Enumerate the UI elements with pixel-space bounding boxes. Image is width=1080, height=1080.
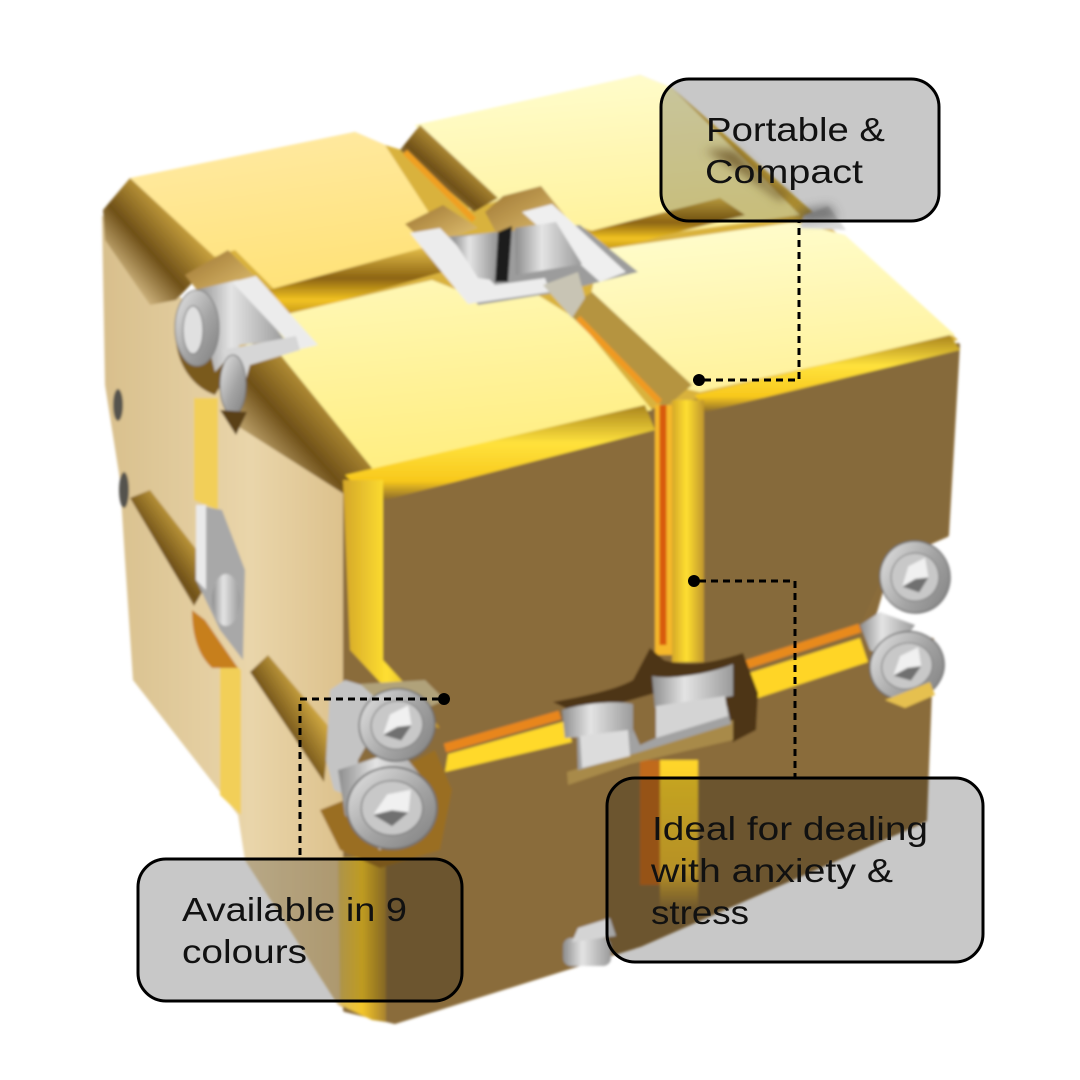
callout: Portable and Compact: Compact: [705, 153, 863, 190]
hinge: top left: [175, 250, 318, 435]
hinge: bottom left with two bolts: [320, 680, 452, 868]
orange seam back: [405, 152, 474, 220]
band between top back and front right: [575, 198, 745, 252]
callout box: [607, 778, 983, 962]
left vertical highlights: [194, 398, 241, 815]
bottom screw: [563, 918, 616, 966]
callout box: [138, 859, 462, 1001]
horizontal seam left: [445, 715, 572, 772]
callout: Ideal for dealing with anxiety and stress: stress: [651, 894, 749, 931]
callout text: Portable &: [706, 111, 885, 148]
lower vertical bars: [660, 760, 698, 910]
top face: back right block: [415, 75, 800, 240]
front upper-right brown face: [680, 345, 958, 665]
band between top back and front left: [268, 246, 442, 318]
top face: front left block: [240, 280, 652, 478]
callout text: Available in 9: [182, 891, 407, 928]
dark bevel: back right block: [400, 125, 498, 212]
callout: Available in 9 colours: [138, 859, 462, 1001]
horizontal seam right: [745, 628, 868, 700]
callout text: Ideal for dealing: [652, 810, 928, 847]
hinge: top centre: [405, 186, 638, 318]
blurred shadow streaks: [705, 150, 838, 222]
left diagonal dark bevels: [130, 490, 330, 782]
callout: Ideal for dealing with anxiety and stress: with anxiety &: [650, 852, 893, 889]
yellow bevel front-left: [345, 405, 655, 500]
leader line: Portable and Compact: [693, 222, 799, 386]
hinge: far top right: [800, 206, 846, 230]
dark bevel: front left block: [228, 332, 372, 494]
product: gold infinity cube: [102, 75, 960, 1022]
leader line: Available in 9 colours: [300, 693, 450, 858]
orange seam top: [578, 318, 660, 402]
front upper-left brown face: [383, 430, 654, 730]
yellow bevel front-right: [695, 335, 960, 412]
hinge: bottom centre: [553, 648, 758, 785]
tan bevel between front top blocks: [565, 292, 692, 408]
hinge: right side with two bolts: [860, 533, 958, 709]
top base: [132, 75, 958, 478]
callout box: [661, 79, 939, 221]
vertical yellow bevel left: [343, 480, 440, 728]
callout: Available in 9 colours: colours: [182, 933, 307, 970]
front base: [345, 345, 958, 1022]
top face: front right block: [590, 222, 955, 392]
lower left yellow bar: [338, 858, 386, 1022]
vertical yellow bevel centre: [672, 400, 704, 662]
left side face: [102, 215, 350, 1012]
hinge: left middle: [192, 505, 245, 668]
callout: Portable and Compact: [661, 79, 939, 221]
orange seam vertical: [655, 405, 672, 655]
screw tips: far left edge: [113, 389, 129, 508]
dark bevel: back left block: [103, 178, 216, 305]
leader line: Ideal for dealing: [688, 575, 795, 777]
callout: Ideal for dealing with anxiety and stress: [607, 778, 983, 962]
top face: back left block: [130, 132, 450, 290]
